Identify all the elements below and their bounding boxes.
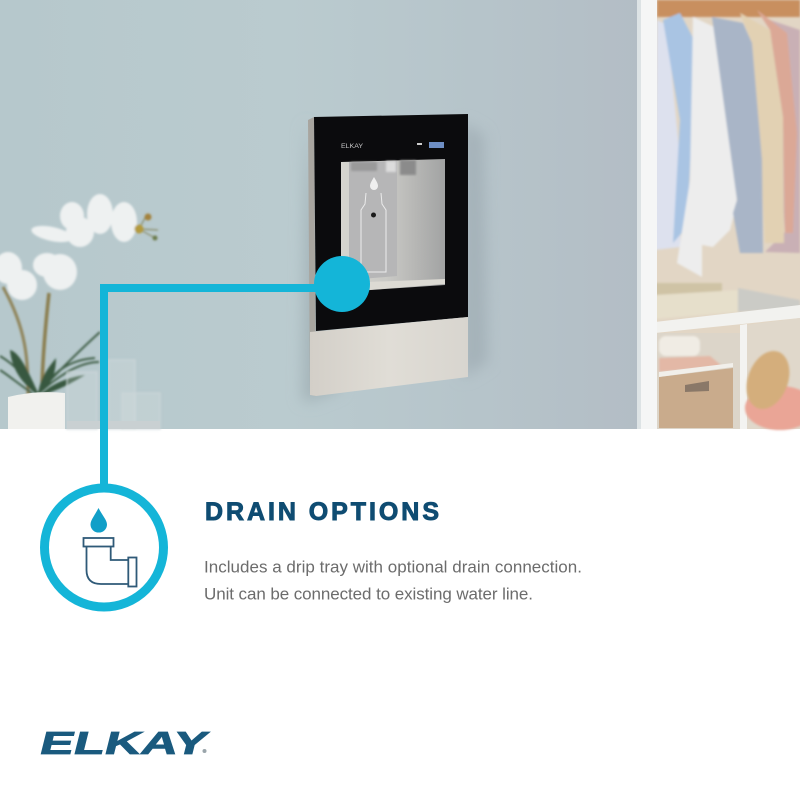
unit display (429, 142, 444, 148)
icon: drain pipe in circle (44, 488, 164, 607)
unit sensor (371, 212, 376, 218)
unit steel base (310, 317, 468, 396)
logo: Elkay: ELKAY (36, 725, 213, 761)
icon: pipe elbow (84, 538, 136, 586)
unit niche (341, 159, 445, 292)
heading: DRAIN OPTIONS (205, 498, 439, 526)
unit bottle filler back plate (349, 161, 397, 280)
box (659, 368, 733, 428)
wall (0, 0, 640, 429)
hangers (657, 0, 800, 17)
unit dispenser fixtures (351, 160, 416, 175)
body text (204, 558, 582, 604)
unit logo: ELKAY (341, 143, 364, 150)
unit side frame (308, 117, 316, 396)
photo: closet shelving with clothes (637, 0, 800, 430)
unit drop icon (370, 177, 378, 190)
unit black front panel (314, 114, 468, 331)
icon: water drop (90, 508, 107, 533)
photo: orchid plant and glassware (0, 194, 160, 429)
unit drip tray (367, 279, 445, 290)
logo: Elkay (36, 725, 213, 761)
closet post (637, 0, 657, 429)
unit bottle outline (361, 193, 386, 272)
connector line and callout dot (100, 256, 370, 488)
photo: room scene (0, 0, 800, 430)
body text: Unit can be connected to existing water line. (204, 584, 533, 604)
photo: bottle filling station unit (302, 114, 488, 402)
body text: Includes a drip tray with optional drain connection. (204, 558, 582, 576)
